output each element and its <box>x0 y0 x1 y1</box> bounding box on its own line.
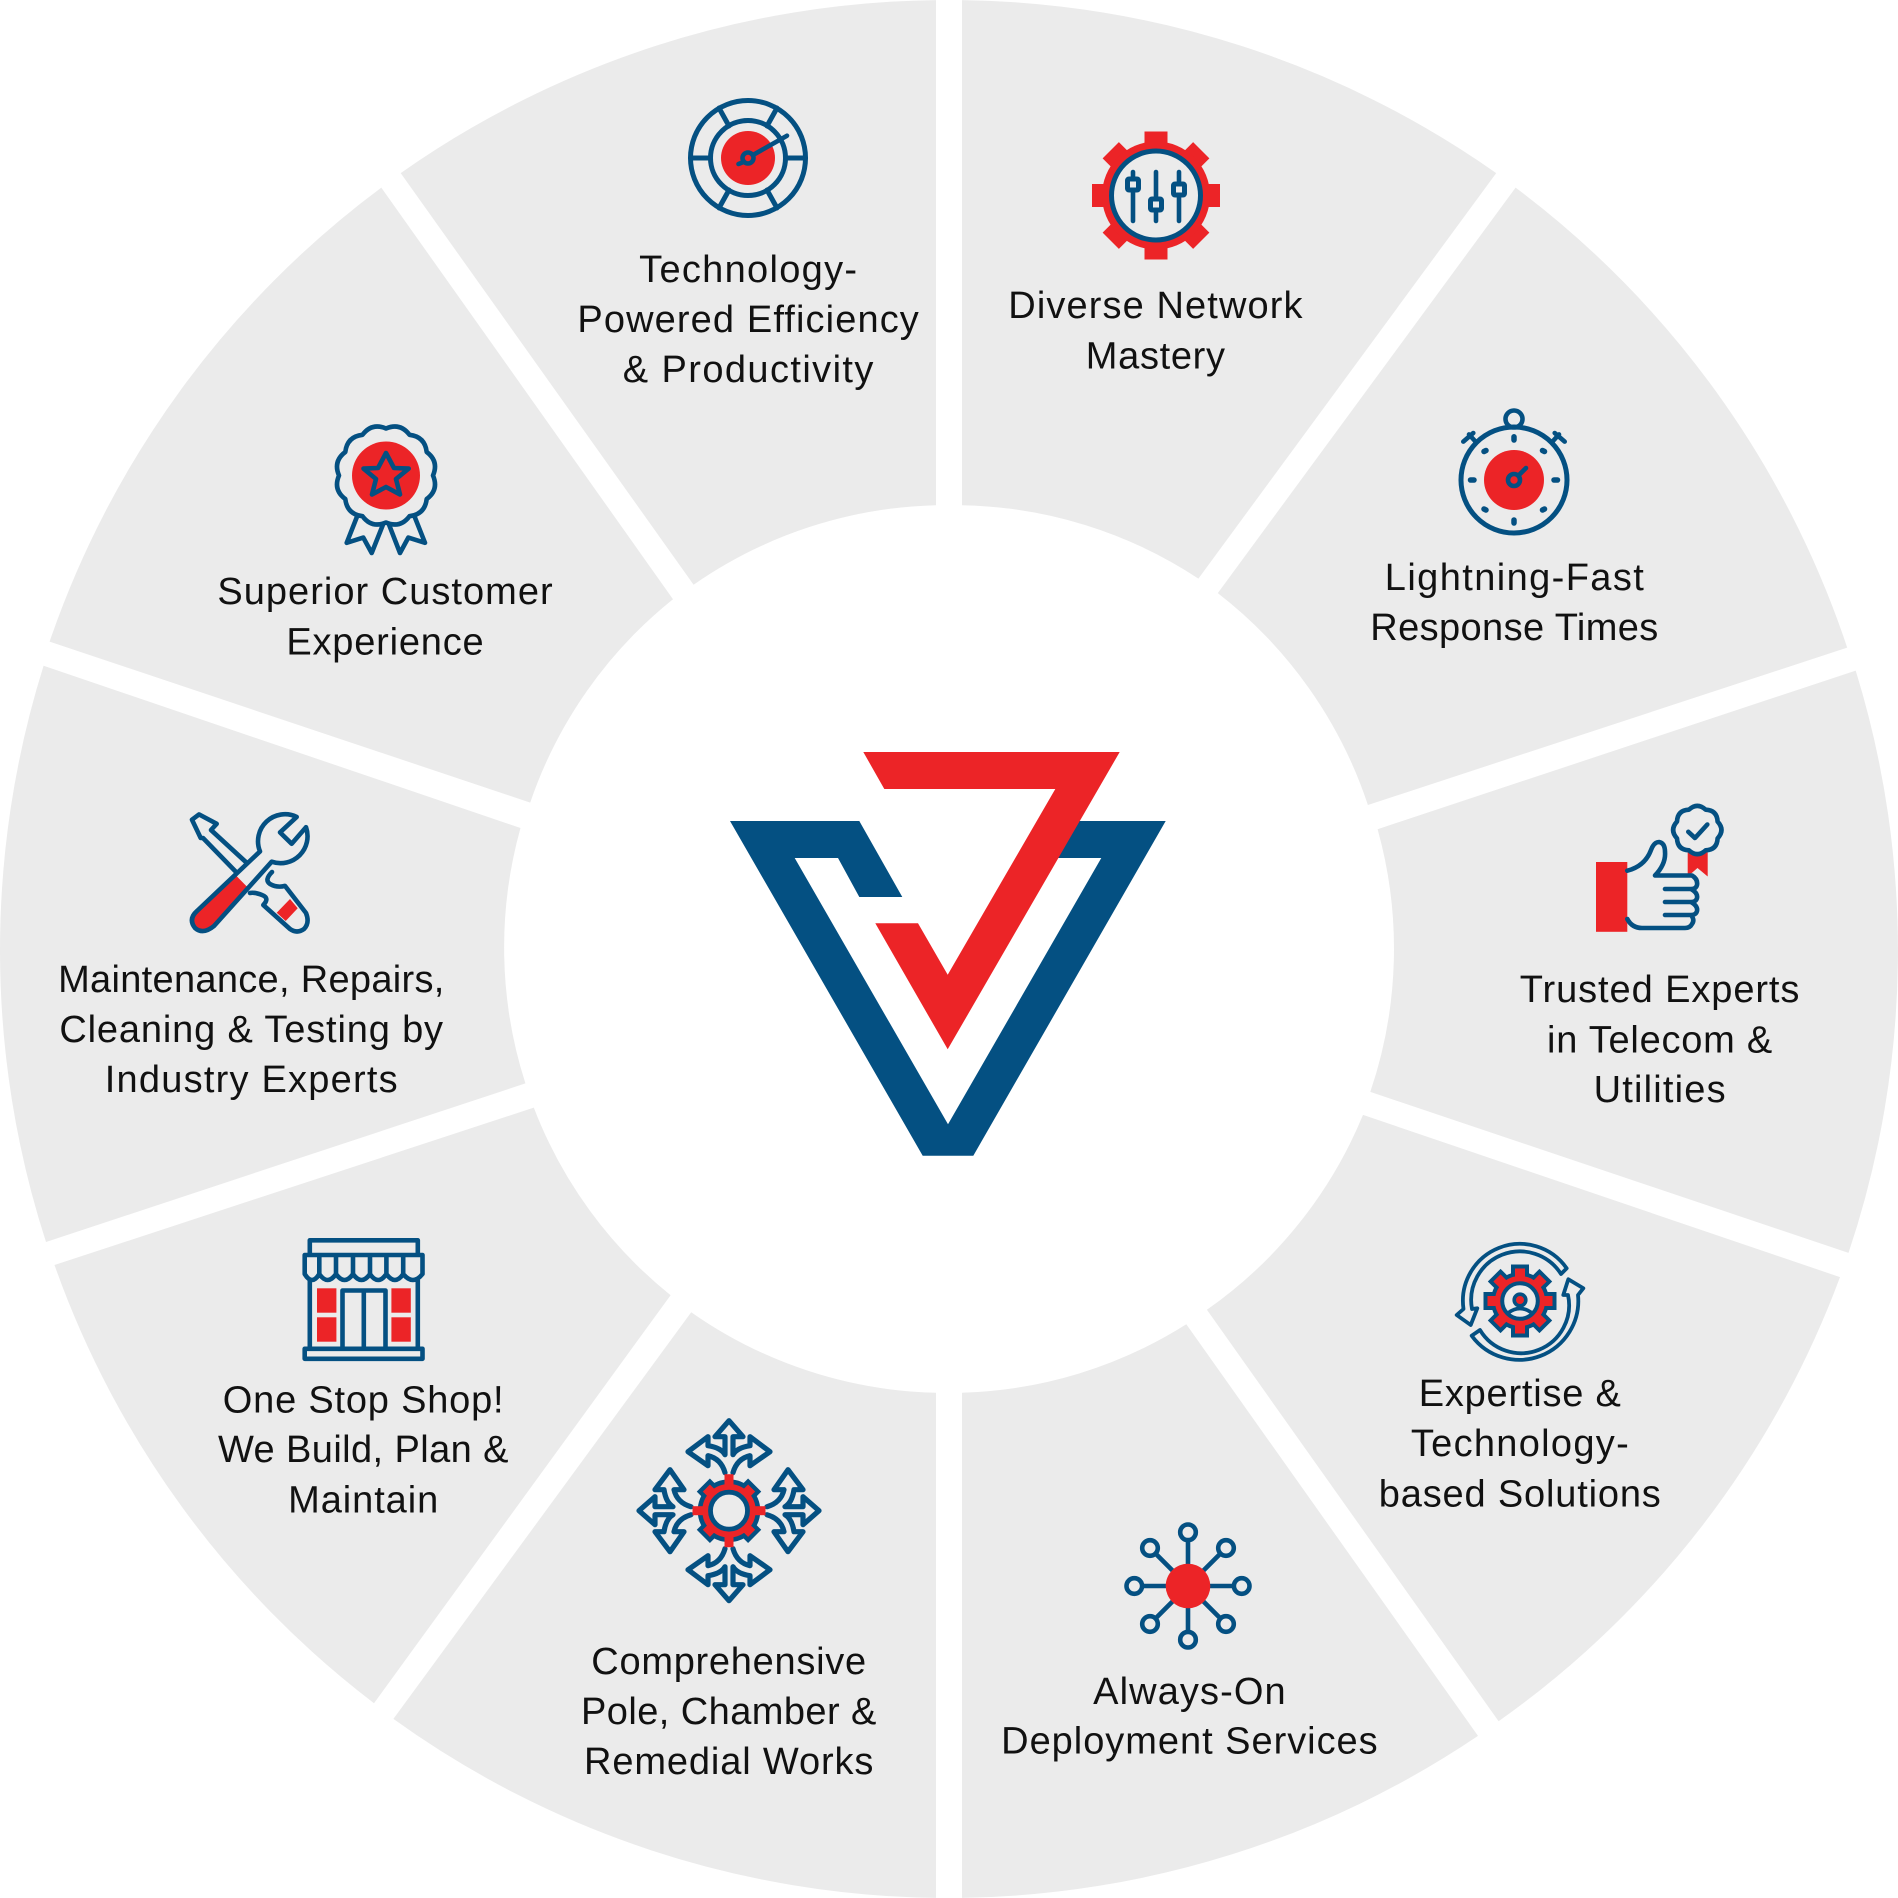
icon: gear with person and cycle arrows <box>1457 1244 1583 1360</box>
panel: Maintenance, Repairs, Cleaning & Testing by Industry Experts <box>0 666 525 1242</box>
icon: crossed tools <box>192 814 308 932</box>
label: Response Times <box>1370 607 1658 649</box>
panel: Trusted Experts in Telecom & Utilities <box>1370 671 1898 1253</box>
icon: gauge <box>690 100 806 216</box>
label: Remedial Works <box>584 1741 873 1783</box>
label: Powered Efficiency <box>577 299 919 341</box>
label: Deployment Services <box>1001 1721 1378 1763</box>
panel: Comprehensive Pole, Chamber & Remedial Works <box>393 1312 936 1898</box>
label: Mastery <box>1086 336 1225 378</box>
label <box>577 249 919 391</box>
panel: Diverse Network Mastery <box>962 0 1496 579</box>
logo: blue mark <box>730 821 1166 1156</box>
panel: Superior Customer Experience <box>50 188 673 803</box>
label <box>1520 969 1799 1111</box>
label: Diverse Network <box>1008 285 1304 327</box>
segment background <box>1207 1115 1840 1721</box>
icon: thumbs up with badge <box>1596 806 1721 932</box>
label: in Telecom & <box>1547 1020 1772 1062</box>
panel: One Stop Shop! We Build, Plan & Maintain <box>54 1108 671 1703</box>
panel: Lightning-Fast Response Times <box>1218 188 1847 805</box>
label: Industry Experts <box>105 1059 398 1101</box>
icon: stopwatch <box>1461 410 1567 533</box>
label: & Productivity <box>623 349 873 391</box>
label <box>1379 1373 1661 1516</box>
label <box>1370 557 1658 649</box>
label: Maintain <box>288 1480 438 1522</box>
segment background <box>393 1312 936 1898</box>
label <box>1001 1671 1378 1763</box>
label: Comprehensive <box>591 1641 866 1683</box>
label: Superior Customer <box>217 571 553 613</box>
label: Trusted Experts <box>1520 969 1799 1011</box>
label: Maintenance, Repairs, <box>58 959 444 1001</box>
label <box>218 1379 508 1522</box>
segment background <box>962 0 1496 579</box>
icon: network hub <box>1126 1524 1250 1648</box>
label <box>1008 285 1304 378</box>
label: Pole, Chamber & <box>581 1691 876 1733</box>
label <box>58 959 444 1101</box>
label: Lightning-Fast <box>1385 557 1644 599</box>
label: Experience <box>286 621 484 663</box>
icon: award rosette <box>337 426 435 553</box>
label <box>581 1641 876 1783</box>
label: One Stop Shop! <box>223 1379 504 1421</box>
segment background <box>54 1108 671 1703</box>
label: Technology- <box>1411 1423 1629 1465</box>
logo: red mark <box>863 752 1120 1049</box>
label: Technology- <box>639 249 857 291</box>
label: Expertise & <box>1419 1373 1621 1415</box>
segment background <box>962 1324 1478 1898</box>
icon: gear with radiating arrows <box>639 1421 819 1601</box>
segment background <box>401 0 936 585</box>
segment background <box>50 188 673 803</box>
label: We Build, Plan & <box>218 1429 508 1471</box>
panel: Technology-Powered Efficiency & Productivity <box>401 0 936 585</box>
label: Utilities <box>1594 1069 1726 1111</box>
label: based Solutions <box>1379 1474 1661 1516</box>
panel: Expertise & Technology-based Solutions <box>1207 1115 1840 1721</box>
label: Always-On <box>1093 1671 1286 1713</box>
segment background <box>1218 188 1847 805</box>
segment background <box>1370 671 1898 1253</box>
icon: gear with sliders <box>1092 132 1220 260</box>
logo <box>730 752 1166 1156</box>
label: Cleaning & Testing by <box>59 1009 443 1051</box>
icon: shop front <box>305 1240 422 1359</box>
panel: Always-On Deployment Services <box>962 1324 1478 1898</box>
label <box>217 571 553 663</box>
segment background <box>0 666 525 1242</box>
